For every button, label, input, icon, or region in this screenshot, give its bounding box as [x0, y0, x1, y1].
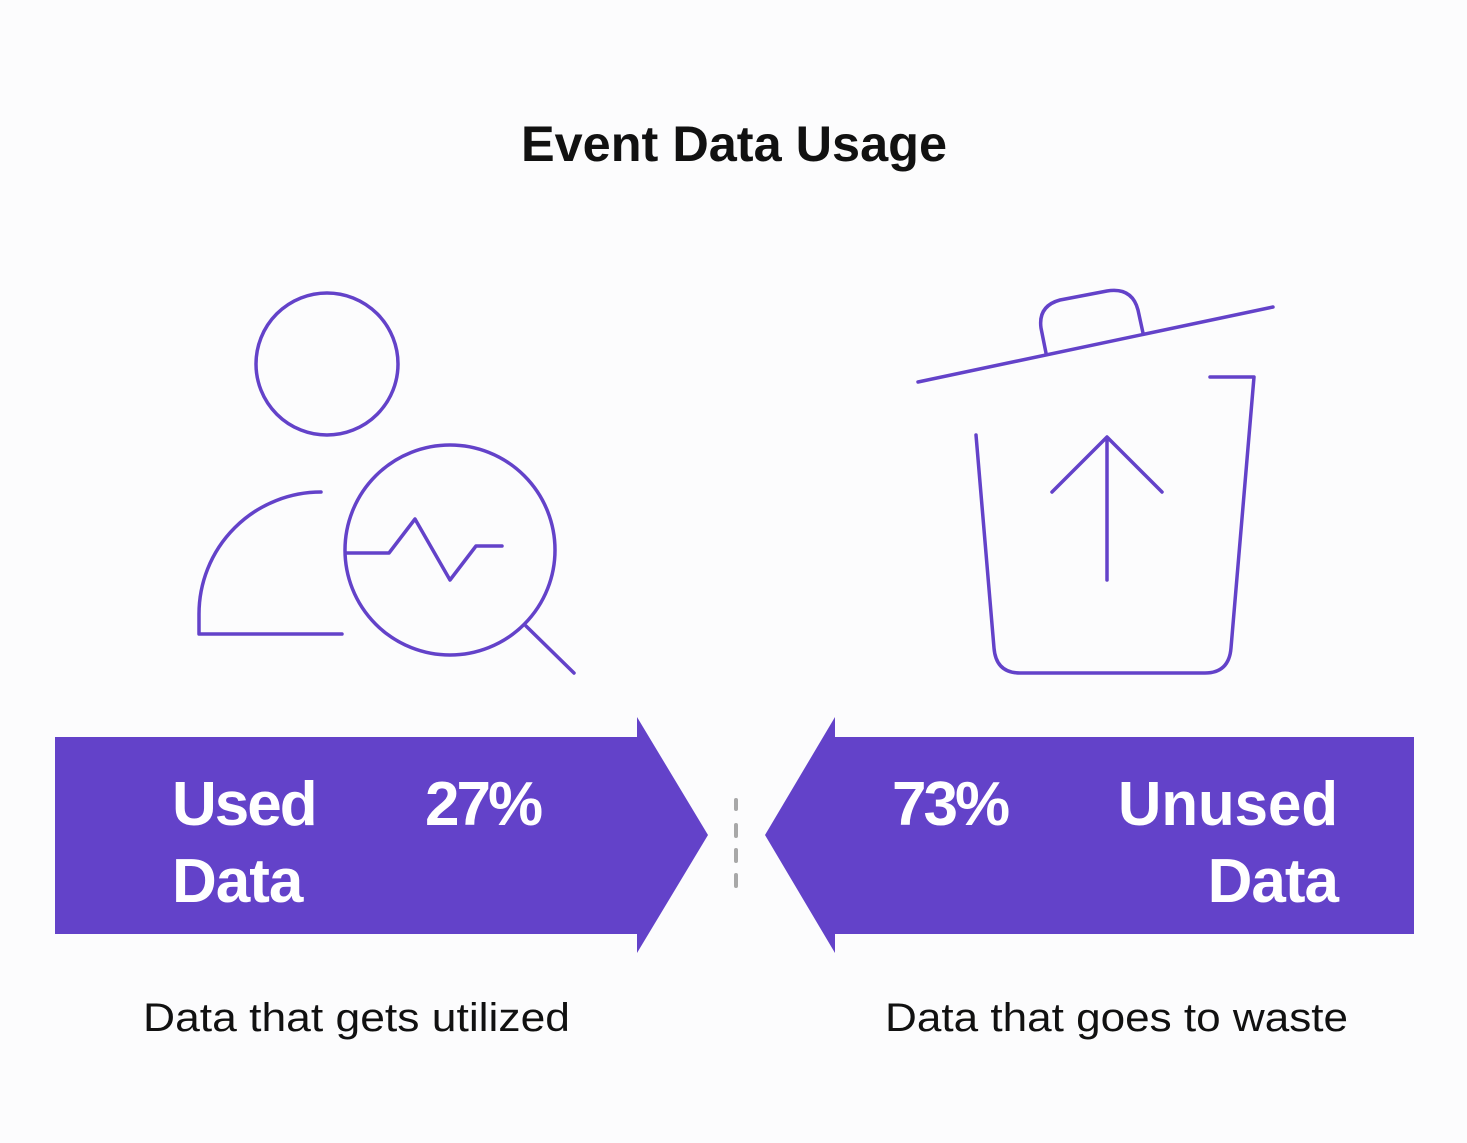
title: Event Data Usage — [521, 116, 947, 172]
arrow: unused data: Unused — [1118, 770, 1338, 839]
icon: trash bin — [918, 290, 1273, 673]
arrow: unused data: Data — [1208, 847, 1340, 916]
divider dashes — [734, 800, 738, 886]
caption: used: Data that gets utilized — [143, 996, 570, 1040]
icon: person with magnifier — [199, 293, 574, 673]
arrow: used data: Used — [172, 770, 316, 839]
arrow: used data — [55, 717, 708, 953]
arrow: unused data — [765, 717, 1414, 953]
arrow: unused data: 73% — [892, 770, 1009, 839]
arrow: used data: Data — [172, 847, 304, 916]
arrow: used data: 27% — [425, 770, 542, 839]
caption: unused: Data that goes to waste — [885, 996, 1348, 1040]
